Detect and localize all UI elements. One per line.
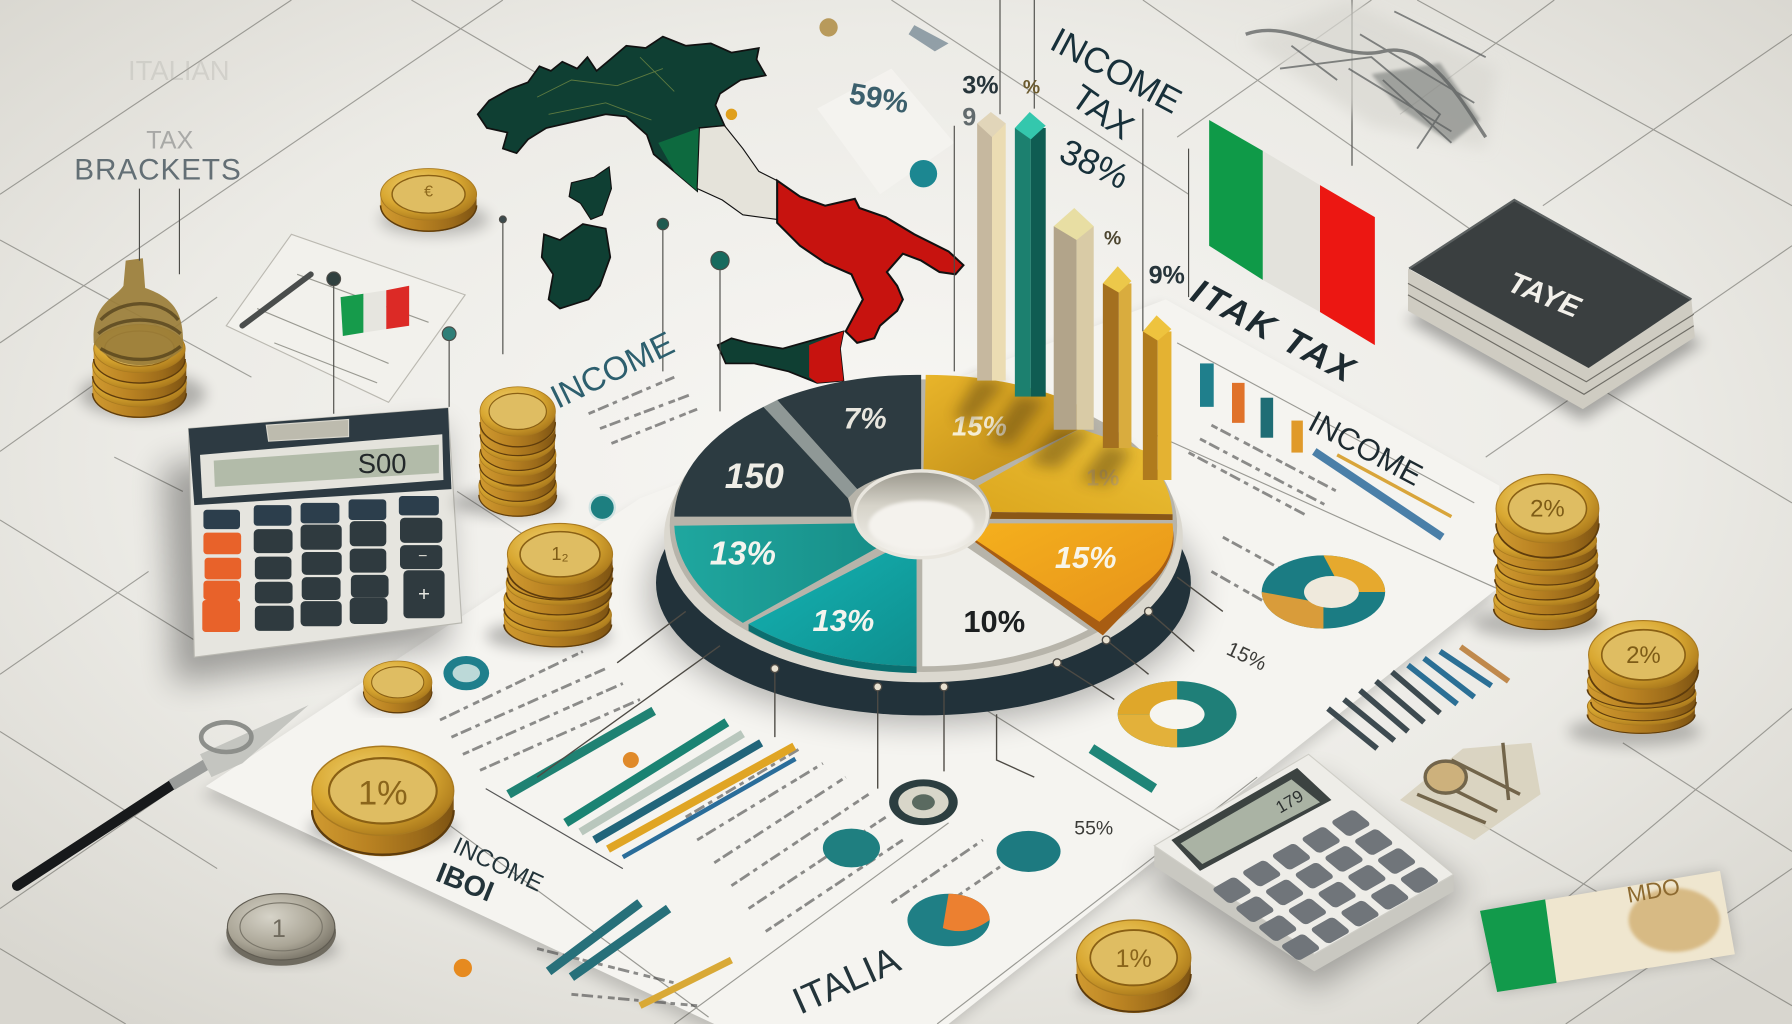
bar shadows on pie bbox=[954, 377, 1131, 486]
coin: small gold mid bbox=[358, 661, 432, 713]
banknote: Italian flag note: MDO bbox=[1625, 873, 1682, 908]
icon: swirl badge bbox=[443, 656, 489, 690]
text: income lower left: INCOME bbox=[449, 832, 547, 897]
coin: top left single stack: € bbox=[424, 184, 433, 201]
calculator: left: S00 bbox=[358, 448, 406, 479]
slice: dark top: 7% bbox=[844, 403, 887, 436]
icon: teal dot bbox=[590, 495, 615, 520]
slice: orange: 15% bbox=[1055, 540, 1117, 575]
bar 3 bbox=[1054, 208, 1094, 430]
calculator: left bbox=[162, 408, 462, 683]
coin stack: far right bbox=[1568, 621, 1701, 746]
icon: pen on sheet bbox=[242, 274, 311, 326]
pen: lower left bbox=[17, 705, 309, 886]
text: bar percentages: % bbox=[1104, 228, 1121, 250]
mini charts on lower paper: 15% bbox=[1223, 637, 1270, 676]
map: Italy bbox=[478, 37, 963, 383]
bar 4 bbox=[1103, 266, 1131, 448]
map: Sicily bbox=[718, 331, 843, 383]
book: TAX ledger: TAYE bbox=[1503, 266, 1586, 325]
paper: main tax document bbox=[201, 299, 1499, 1024]
slice: gold top: 15% bbox=[952, 410, 1007, 441]
text: income label left: INCOME bbox=[545, 325, 680, 416]
coin: gold bottom: 1% bbox=[1116, 945, 1152, 973]
pin lines bbox=[139, 0, 1352, 414]
title: tax brackets: BRACKETS bbox=[74, 153, 242, 186]
bar 5 bbox=[1143, 315, 1171, 480]
map sketch: top right bbox=[1246, 0, 1497, 149]
icon: small italian flag bbox=[341, 286, 409, 336]
text: income label right: INCOME bbox=[1303, 404, 1428, 493]
pie base bbox=[649, 379, 1198, 723]
map: Corsica bbox=[569, 167, 611, 219]
calculator: keys bbox=[1211, 809, 1440, 961]
calculator: solar panel bbox=[266, 419, 349, 441]
mini charts on lower paper: 55% bbox=[1074, 817, 1113, 839]
coin stack: right: 2% bbox=[1530, 496, 1565, 523]
pie: donut chart slices bbox=[674, 375, 1174, 673]
connectors under pie bbox=[537, 577, 1223, 789]
slice: gold right: 1% bbox=[1086, 465, 1119, 491]
banknote: Italian flag note bbox=[1480, 871, 1735, 992]
title: income tax 38% bbox=[1044, 20, 1188, 197]
book: TAX ledger bbox=[1406, 200, 1703, 421]
text: bar percentages bbox=[962, 72, 1185, 289]
calculator: left: + bbox=[418, 583, 430, 606]
calculator: display: 179 bbox=[1272, 786, 1307, 817]
coin: gold bottom bbox=[1077, 920, 1191, 1013]
coin stack: beside calculator: 1₂ bbox=[551, 543, 569, 564]
paper: upper left sheet with flag bbox=[226, 234, 465, 402]
title: income tax 38%: TAX bbox=[1064, 77, 1141, 147]
title: tax brackets: TAX bbox=[146, 127, 194, 155]
title: tax brackets bbox=[74, 55, 242, 186]
slice: teal bottom: 13% bbox=[813, 603, 874, 638]
map: Sardinia bbox=[542, 224, 610, 309]
chart: donut teal orange right bbox=[1262, 555, 1385, 629]
slice: teal left: 13% bbox=[710, 536, 776, 573]
text: income lower left: IBOI bbox=[432, 857, 498, 908]
slice: white bbox=[922, 546, 1088, 666]
chart: donut gold teal bbox=[1118, 681, 1237, 747]
title: income tax 38%: 38% bbox=[1054, 131, 1135, 197]
text: bar percentages: % bbox=[1023, 77, 1040, 99]
title: income tax 38%: INCOME bbox=[1044, 20, 1188, 122]
text: bar percentages: 9% bbox=[1149, 261, 1185, 289]
icon: percent note near map: 59% bbox=[847, 77, 911, 120]
chart: 3D bars bbox=[977, 112, 1171, 480]
calculator: display bbox=[1171, 768, 1331, 871]
slice: teal left bbox=[674, 523, 880, 623]
slice: orange bbox=[971, 523, 1174, 635]
icon: orange dot bbox=[454, 959, 472, 977]
slice: dark left bbox=[674, 400, 857, 517]
coin stack: right bbox=[1471, 474, 1603, 639]
slice: teal bottom bbox=[749, 551, 917, 673]
icon: jar of coins bbox=[80, 258, 206, 418]
bar 1 bbox=[977, 112, 1006, 381]
flag: large Italian flag bbox=[1209, 120, 1375, 345]
icon: sketch on right bbox=[1400, 743, 1541, 840]
mini charts on lower paper bbox=[549, 637, 1270, 1006]
text: ITAK TAX label: ITAK TAX bbox=[1185, 271, 1363, 391]
coin stack: beside calculator bbox=[486, 523, 613, 650]
title: tax brackets: ITALIAN bbox=[128, 55, 230, 86]
slice: dark left: 150 bbox=[725, 456, 784, 496]
coin: large 1% bbox=[309, 746, 457, 856]
coin: top left single stack bbox=[379, 169, 489, 235]
bar 2 bbox=[1015, 112, 1046, 397]
slice: dark top bbox=[777, 375, 921, 489]
slice: gold top bbox=[923, 375, 1080, 480]
coin stack: above calculator right bbox=[454, 387, 563, 517]
slice: gold right bbox=[978, 429, 1173, 520]
chart: lower diagonal line chart bbox=[486, 711, 795, 869]
pie: centre hole bbox=[855, 471, 987, 558]
coin stack: far right: 2% bbox=[1626, 642, 1661, 669]
coin: silver bbox=[224, 894, 338, 966]
slice: white: 10% bbox=[963, 604, 1025, 639]
coin: large 1%: 1% bbox=[358, 775, 408, 813]
chart: barcode stripes bbox=[1328, 647, 1509, 749]
chart: small bars on right paper bbox=[1200, 363, 1451, 537]
text: bar percentages: 3% bbox=[962, 72, 999, 100]
text: bar percentages: 9 bbox=[962, 104, 976, 132]
calculator: lower right bbox=[1143, 754, 1469, 989]
icon: percent note near map bbox=[726, 18, 954, 194]
calculator: left: − bbox=[418, 548, 428, 565]
coin: silver: 1 bbox=[272, 915, 286, 943]
text: Italia: ITALIA bbox=[786, 938, 907, 1022]
paper scribbles bbox=[440, 377, 1337, 1006]
